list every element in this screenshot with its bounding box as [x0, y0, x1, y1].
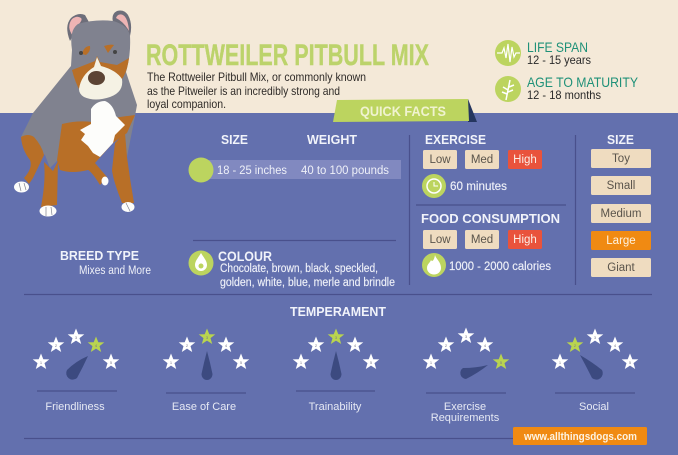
gauge: friendliness: 1	[40, 360, 43, 365]
gauge: friendliness: 4	[95, 343, 98, 348]
gauge: social	[552, 328, 638, 413]
size and weight	[188, 132, 401, 182]
temperament heading: TEMPERAMENT	[290, 304, 386, 319]
exercise	[422, 132, 542, 198]
size and weight: 18 - 25 inches	[217, 165, 287, 177]
size scale: Giant	[607, 262, 636, 274]
exercise: Low	[429, 154, 451, 166]
food consumption: Low	[429, 234, 451, 246]
exercise: EXERCISE	[425, 132, 486, 147]
gauge: social: 5	[629, 360, 632, 365]
food consumption: Med	[471, 234, 493, 246]
gauge: ease of care: 2	[186, 343, 189, 348]
breed type	[60, 248, 151, 277]
gauge: ease of care: 4	[225, 343, 228, 348]
breed type: BREED TYPE	[60, 248, 139, 263]
food consumption: FOOD CONSUMPTION	[421, 211, 560, 226]
gauge: trainability	[293, 328, 379, 413]
age to maturity: AGE TO MATURITY	[527, 74, 639, 90]
age to maturity: 12 - 18 months	[527, 88, 601, 102]
gauge: ease of care: 5	[240, 360, 243, 365]
website badge	[513, 427, 647, 445]
gauge: trainability: 1	[300, 360, 303, 365]
intro text: as the Pitweiler is an incredibly strong and	[147, 84, 340, 98]
gauge: ease of care	[163, 328, 249, 413]
exercise: High	[513, 154, 537, 166]
gauge: social: 3	[594, 335, 597, 340]
gauge: trainability: 5	[370, 360, 373, 365]
gauge: exercise requirements	[423, 328, 509, 424]
gauge: ease of care: 1	[170, 360, 173, 365]
food consumption: 1000 - 2000 calories	[449, 261, 551, 273]
exercise: 60 minutes	[450, 181, 507, 193]
gauge: social: 2	[574, 343, 577, 348]
size scale: Large	[606, 235, 636, 247]
gauge: trainability: 2	[315, 343, 318, 348]
colour	[188, 249, 395, 289]
gauge: exercise requirements: 4	[484, 343, 487, 348]
size scale: Medium	[601, 208, 641, 220]
gauge: exercise requirements: 2	[445, 343, 448, 348]
gauge: exercise requirements: Requirements	[431, 412, 500, 424]
colour: COLOUR	[218, 249, 272, 264]
dividers	[24, 135, 652, 438]
website badge: www.allthingsdogs.com	[523, 431, 637, 443]
intro text: The Rottweiler Pitbull Mix, or commonly known	[147, 70, 366, 84]
size and weight: SIZE	[221, 132, 248, 147]
age to maturity	[495, 74, 639, 102]
dog illustration	[14, 10, 137, 216]
header band	[0, 0, 678, 113]
life span: LIFE SPAN	[527, 39, 588, 55]
size and weight: 40 to 100 pounds	[301, 165, 389, 177]
breed type: Mixes and More	[79, 265, 151, 277]
gauge: friendliness: 2	[55, 343, 58, 348]
gauge: trainability: 4	[354, 343, 357, 348]
intro text: loyal companion.	[147, 97, 226, 111]
gauge: social: 4	[614, 343, 617, 348]
size scale: Small	[607, 180, 635, 192]
gauge: ease of care: Ease of Care	[172, 401, 236, 413]
exercise: Med	[471, 154, 493, 166]
gauge: ease of care: 3	[206, 335, 209, 340]
gauge: exercise requirements: 1	[430, 360, 433, 365]
gauge: social: Social	[579, 401, 609, 413]
food consumption: High	[513, 234, 537, 246]
colour: golden, white, blue, merle and brindle	[220, 277, 395, 289]
life span	[495, 39, 591, 67]
colour: Chocolate, brown, black, speckled,	[220, 263, 378, 275]
quick facts ribbon: QUICK FACTS	[360, 103, 446, 119]
gauge: social: 1	[559, 360, 562, 365]
life span: 12 - 15 years	[527, 53, 591, 67]
gauge: friendliness: Friendliness	[45, 401, 105, 413]
quick facts ribbon	[333, 99, 477, 122]
gauge: exercise requirements: Exercise	[444, 401, 486, 413]
size scale	[591, 132, 651, 277]
size and weight: WEIGHT	[307, 132, 357, 147]
title: ROTTWEILER PITBULL MIX	[146, 39, 429, 72]
size scale: SIZE	[607, 132, 634, 147]
gauge: friendliness: 5	[110, 360, 113, 365]
gauge: trainability: 3	[335, 335, 338, 340]
food consumption	[421, 211, 560, 277]
size scale: Toy	[612, 153, 630, 165]
gauge: exercise requirements: 3	[465, 334, 468, 339]
gauge: exercise requirements: 5	[500, 360, 503, 365]
gauge: friendliness: 3	[75, 335, 78, 340]
intro text	[147, 70, 366, 111]
gauge: friendliness	[33, 328, 119, 413]
gauge: trainability: Trainability	[309, 401, 362, 413]
